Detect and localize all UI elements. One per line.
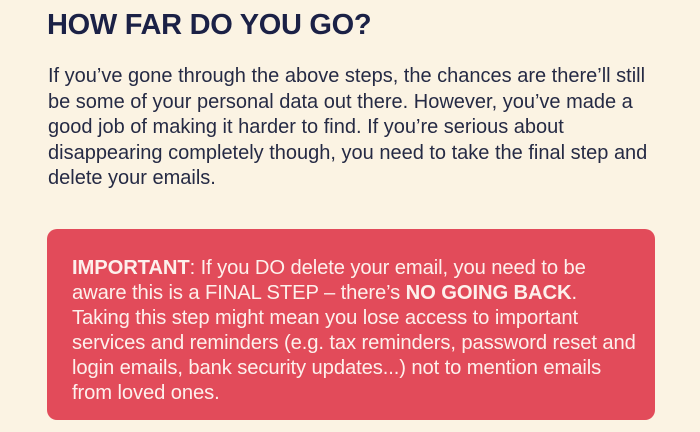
callout text: IMPORTANT: If you DO delete your email, you need to be xyxy=(72,257,586,279)
callout text: services and reminders (e.g. tax reminders, password reset and xyxy=(72,332,636,354)
text block: intro: If you’ve gone through the above steps, the chances are there’ll still xyxy=(48,65,645,87)
text block: intro: disappearing completely though, you need to take the final step and xyxy=(48,142,647,164)
text block: intro: good job of making it harder to find. If you’re serious about xyxy=(48,116,564,138)
callout text: Taking this step might mean you lose access to important xyxy=(72,307,578,329)
title: HOW FAR DO YOU GO? xyxy=(47,9,371,41)
text block: intro: be some of your personal data out there. However, you’ve made a xyxy=(48,90,633,112)
text block: intro: delete your emails. xyxy=(48,167,216,189)
callout text: from loved ones. xyxy=(72,382,220,404)
callout text: login emails, bank security updates...) not to mention emails xyxy=(72,357,601,379)
callout text xyxy=(72,257,636,404)
callout: important warning xyxy=(47,229,655,420)
text block: intro xyxy=(48,65,647,189)
callout text: aware this is a FINAL STEP – there’s NO GOING BACK. xyxy=(72,282,577,304)
